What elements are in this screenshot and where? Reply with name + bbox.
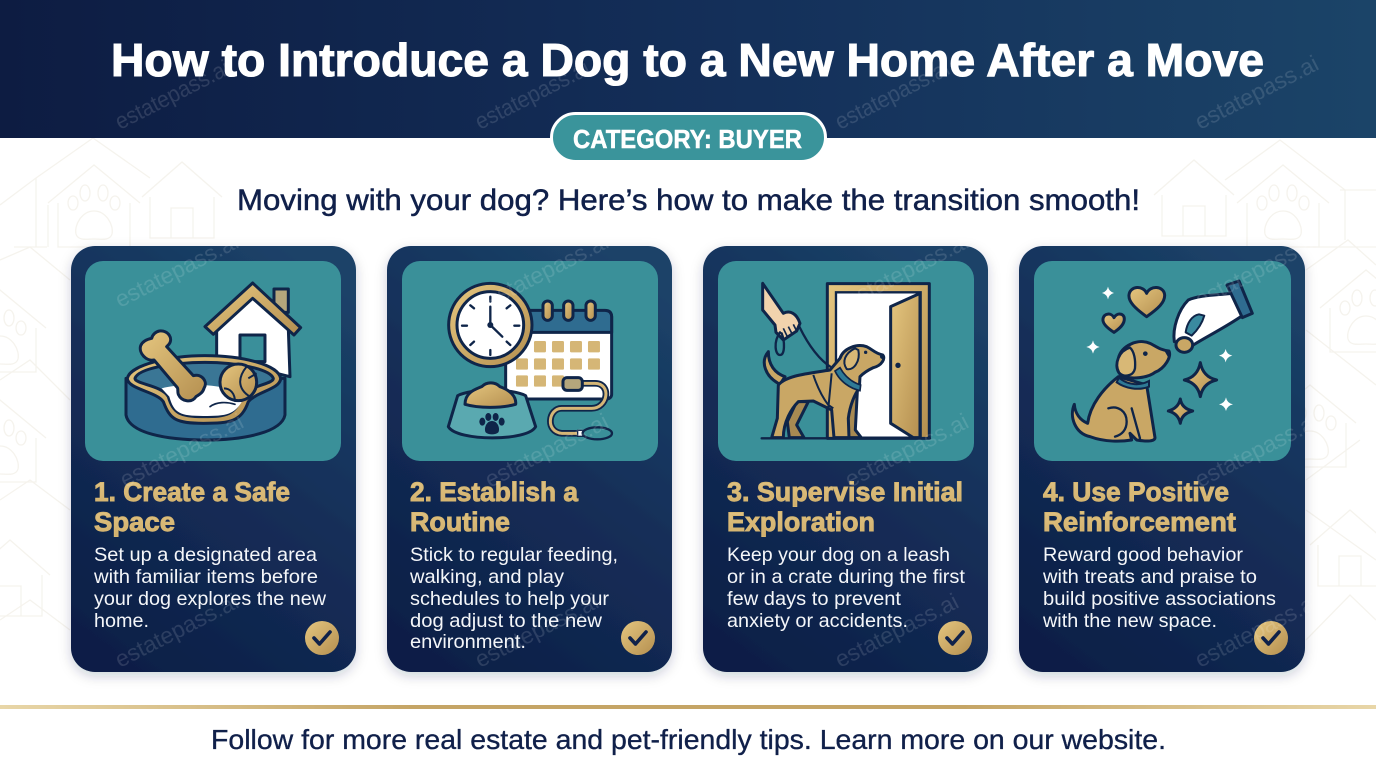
icon: clock, calendar, food bowl and leash	[448, 283, 612, 439]
footer band	[0, 709, 1376, 768]
category badge	[552, 114, 826, 162]
step 2 body text	[409, 544, 618, 653]
step 1 body text: home.	[94, 610, 149, 632]
step 1 body text: with familiar items before	[93, 566, 318, 588]
footer text: Follow for more real estate and pet-friendly tips. Learn more on our website.	[211, 724, 1166, 755]
panel: step 2	[387, 246, 672, 672]
step 1 body text: your dog explores the new	[94, 588, 327, 610]
step 4 body text: Reward good behavior	[1043, 544, 1244, 566]
step 4 heading	[1043, 477, 1236, 537]
watermarks: estatepass.ai	[110, 228, 243, 312]
step 4 body text: build positive associations	[1043, 588, 1276, 610]
icon: check badge	[621, 621, 655, 655]
subtitle: Moving with your dog? Here’s how to make the transition smooth!	[237, 184, 1140, 217]
step 3 body text: or in a crate during the first	[727, 566, 966, 588]
watermarks: estatepass.ai	[830, 55, 954, 134]
title: How to Introduce a Dog to a New Home After a Move	[111, 34, 1264, 86]
watermarks: estatepass.ai	[470, 588, 603, 672]
step 3 body text	[727, 544, 966, 632]
watermarks: estatepass.ai	[830, 588, 963, 672]
watermarks: estatepass.ai	[1190, 588, 1323, 672]
watermarks	[110, 50, 1323, 672]
step 2 body text: schedules to help your	[410, 588, 610, 610]
step 3 heading: 3. Supervise Initial	[727, 477, 963, 507]
icon: check badge	[1254, 621, 1288, 655]
step 2 heading: Routine	[410, 507, 510, 537]
step 1 body text: Set up a designated area	[94, 544, 317, 566]
watermarks: estatepass.ai	[470, 55, 594, 134]
icon: check badge	[938, 621, 972, 655]
step 4 heading: Reinforcement	[1043, 507, 1236, 537]
step 2 body text: Stick to regular feeding,	[410, 544, 618, 566]
step 2 body text: walking, and play	[409, 566, 564, 588]
step 2 body text: environment.	[410, 631, 526, 653]
watermarks: estatepass.ai	[480, 228, 613, 312]
step 3 heading	[727, 477, 963, 537]
step 3 body text: few days to prevent	[727, 588, 902, 610]
panel: step 1	[71, 246, 356, 672]
icon: dog bed with bone, ball and house	[126, 283, 301, 440]
watermarks: estatepass.ai	[110, 55, 234, 134]
watermarks: estatepass.ai	[1190, 408, 1323, 492]
step 2 heading: 2. Establish a	[410, 477, 578, 507]
step 2 body text: dog adjust to the new	[410, 610, 603, 632]
step 1 body text	[93, 544, 327, 632]
step 4 body text: with treats and praise to	[1042, 566, 1257, 588]
step 4 heading: 4. Use Positive	[1043, 477, 1229, 507]
watermarks: estatepass.ai	[110, 588, 243, 672]
step 1 heading: 1. Create a Safe	[94, 477, 290, 507]
step 3 body text: anxiety or accidents.	[727, 610, 908, 632]
category badge: CATEGORY: BUYER	[573, 124, 802, 154]
watermarks: estatepass.ai	[480, 408, 613, 492]
step 1 heading	[94, 477, 290, 537]
panel: step 4	[1019, 246, 1305, 672]
step 2 heading	[410, 477, 578, 537]
watermarks: estatepass.ai	[115, 408, 248, 492]
panel: step 3	[703, 246, 988, 672]
icon: puppy receiving a treat with hearts and sparkles	[1072, 281, 1252, 441]
watermarks: estatepass.ai	[840, 228, 973, 312]
header band	[0, 0, 1376, 138]
step 3 body text: Keep your dog on a leash	[727, 544, 950, 566]
step 3 heading: Exploration	[727, 507, 875, 537]
step 4 body text: with the new space.	[1042, 610, 1217, 632]
watermarks: estatepass.ai	[1190, 228, 1323, 312]
icon: check badge	[305, 621, 339, 655]
step 4 body text	[1042, 544, 1276, 632]
watermarks: estatepass.ai	[840, 408, 973, 492]
watermarks: estatepass.ai	[1190, 50, 1323, 134]
icon: dog on leash at open door	[762, 283, 930, 438]
step 1 heading: Space	[94, 507, 175, 537]
